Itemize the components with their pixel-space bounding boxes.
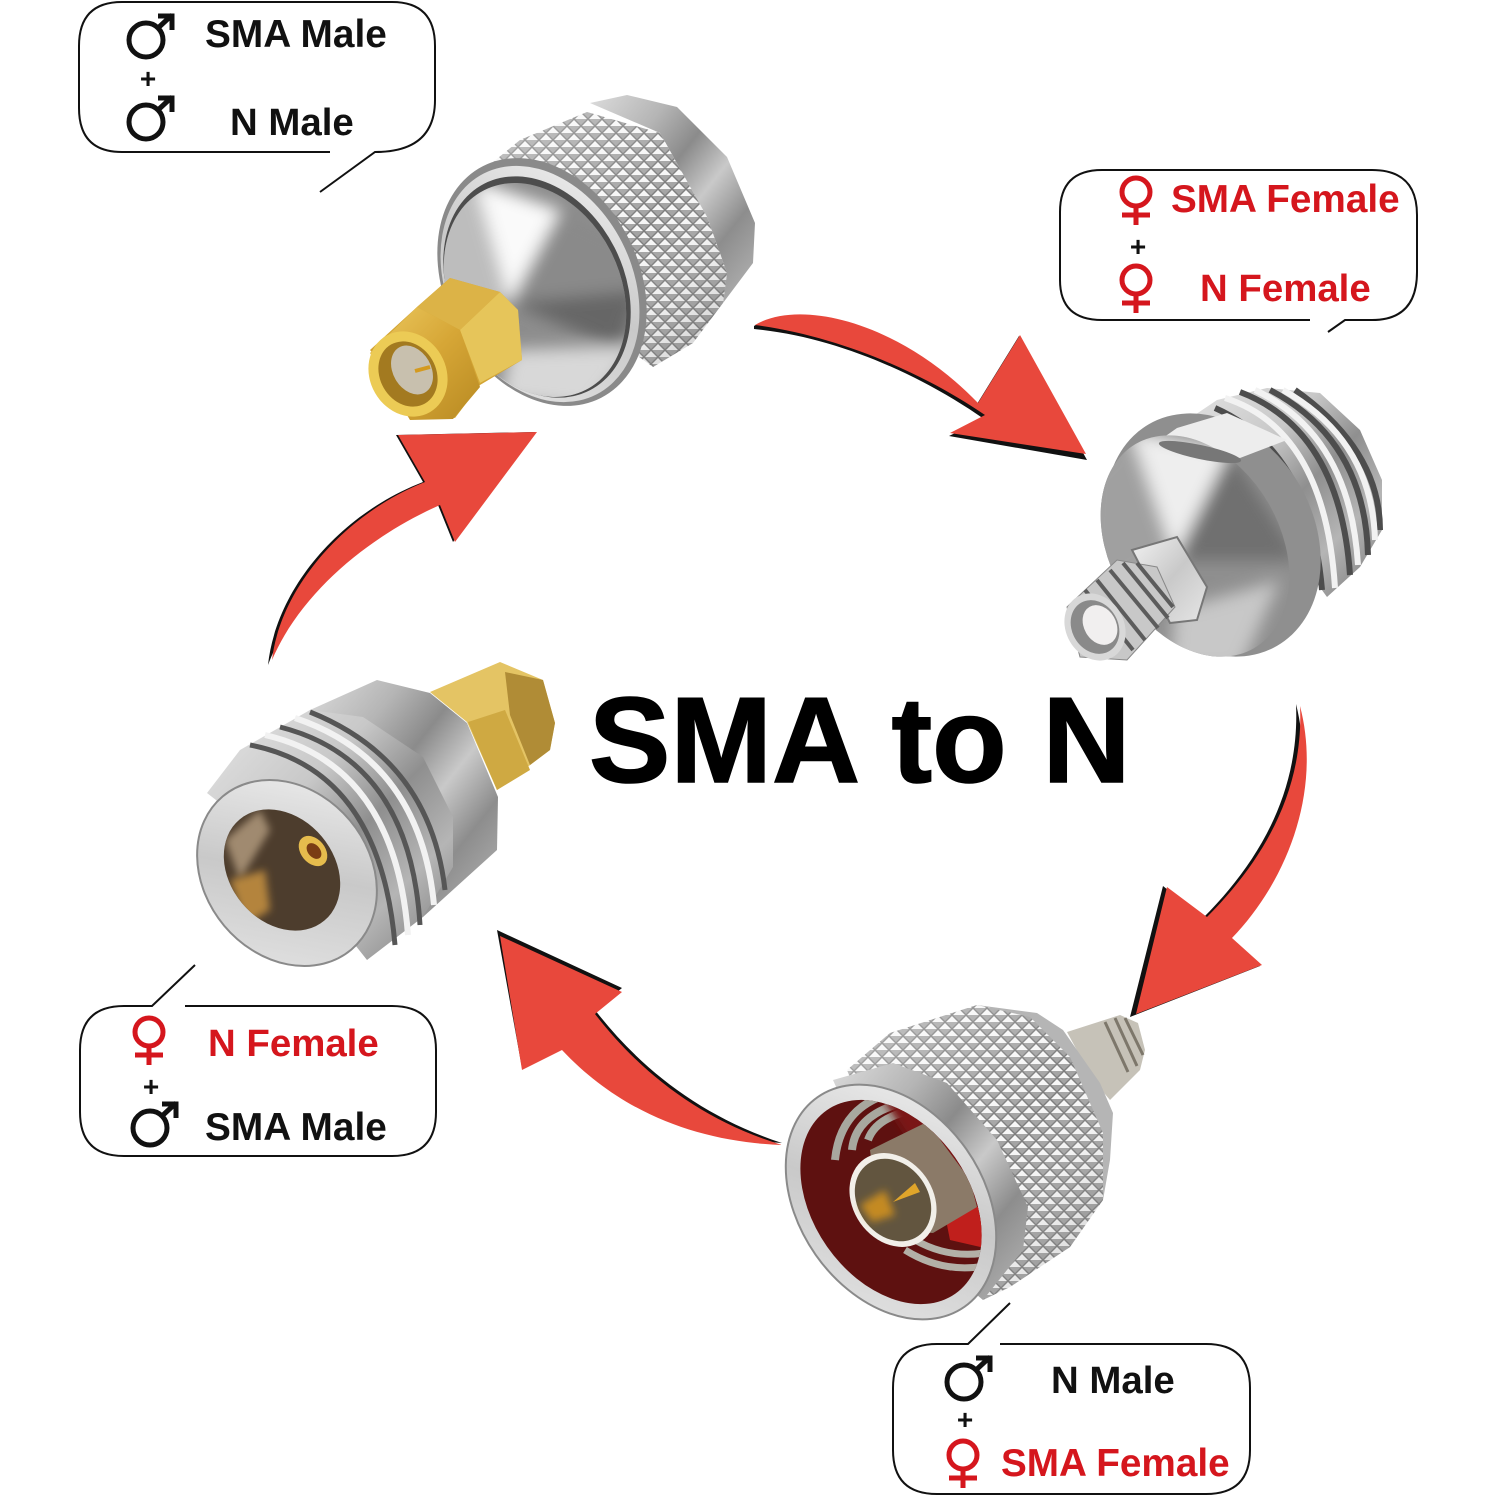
socket pin (293, 830, 333, 872)
callout: SMA Male + N Male (79, 2, 435, 192)
plus sign: + (1130, 231, 1146, 262)
gold SMA (430, 662, 555, 790)
label: N Female: N Female (1200, 267, 1371, 310)
knurled grip (847, 1005, 1103, 1300)
connector: SMA female to N female (1064, 387, 1383, 660)
cone (1100, 435, 1288, 657)
icon: female symbol (135, 1018, 163, 1065)
cone (444, 183, 626, 397)
connector: N male to SMA female (784, 1005, 1145, 1320)
connector: SMA male to N male (353, 95, 755, 442)
label: N Female: N Female (208, 1022, 379, 1065)
socket (224, 809, 340, 931)
icon: male symbol (129, 97, 172, 139)
collar ring (397, 122, 687, 442)
machined flat slot (1157, 436, 1243, 468)
SMA thread (1067, 560, 1175, 660)
icon: female symbol (1122, 178, 1150, 225)
label: SMA Male: SMA Male (205, 13, 387, 56)
arrow: N male adapter to N female adapter (497, 930, 782, 1145)
SMA female stub (1067, 1015, 1145, 1100)
arrow: SMA male adapter to SMA female adapter (754, 314, 1087, 460)
arrow: SMA female adapter to N male adapter (1130, 704, 1307, 1017)
flat top highlight (1160, 413, 1287, 458)
SMA shoulder (1132, 537, 1207, 623)
center contact (832, 1136, 954, 1264)
arrow: N female adapter to SMA male adapter (268, 432, 537, 665)
threads (207, 710, 453, 960)
callout: SMA Female + N Female (1060, 170, 1417, 332)
icon: male symbol (947, 1357, 990, 1399)
icon: male symbol (129, 15, 172, 57)
plus sign: + (140, 63, 156, 94)
callout: N Female + SMA Male (80, 965, 436, 1156)
label: SMA Female: SMA Female (1001, 1442, 1230, 1485)
title: SMA to N (589, 672, 1131, 808)
front ring (742, 1044, 1040, 1360)
rear band (977, 1005, 1113, 1200)
SMA face (1052, 582, 1138, 672)
front ring (160, 744, 414, 1002)
label: SMA Male: SMA Male (205, 1106, 387, 1149)
interior (800, 1100, 982, 1304)
label: N Male: N Male (1051, 1359, 1175, 1402)
label: SMA Female: SMA Female (1171, 178, 1400, 221)
gold front face (353, 317, 463, 431)
threaded end (1177, 388, 1382, 597)
gold nut (370, 278, 522, 420)
plus sign: + (143, 1071, 159, 1102)
far band (590, 95, 755, 303)
label: N Male: N Male (230, 101, 354, 144)
front band (833, 1063, 1028, 1300)
callout: N Male + SMA Female (893, 1303, 1250, 1494)
icon: female symbol (1122, 266, 1150, 313)
plus sign: + (957, 1404, 973, 1435)
body band (1062, 374, 1364, 696)
silver body (310, 680, 498, 917)
connector: N female to SMA male (196, 662, 555, 967)
icon: female symbol (949, 1441, 977, 1488)
knurled grip (487, 112, 727, 367)
icon: male symbol (133, 1103, 176, 1145)
